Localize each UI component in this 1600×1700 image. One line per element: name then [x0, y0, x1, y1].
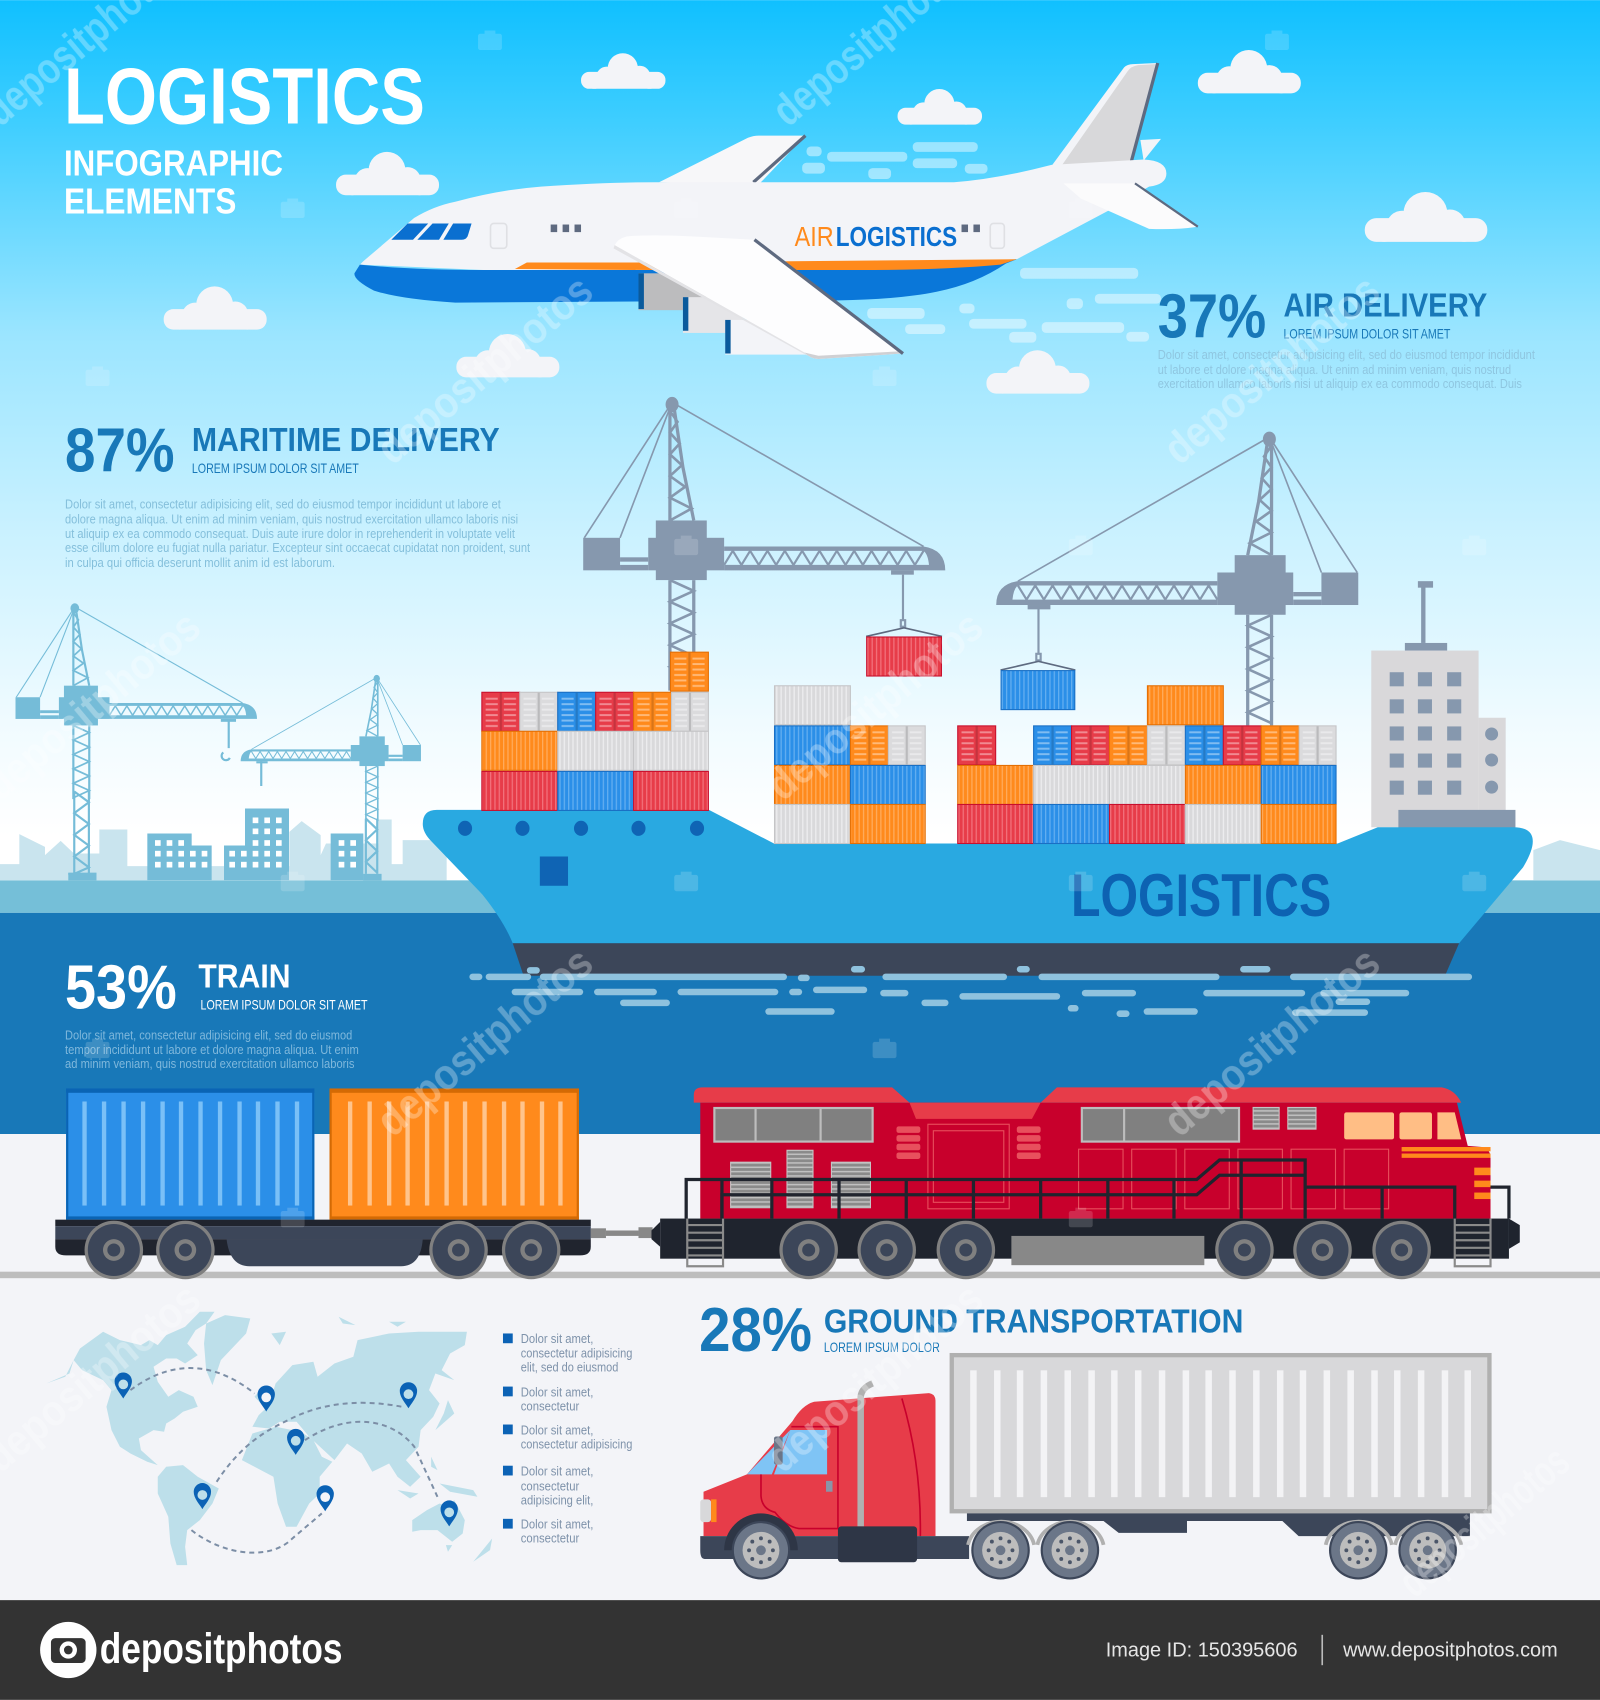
map legend list: consectetur — [521, 1399, 579, 1413]
locomotive — [651, 1087, 1520, 1279]
train stat: 53% — [65, 953, 177, 1022]
water ripples — [469, 966, 1472, 1017]
mirror — [774, 1436, 783, 1465]
fuselage — [360, 159, 1166, 271]
railings — [686, 1160, 1509, 1219]
map legend list: Dolor sit amet, — [521, 1423, 593, 1437]
train stat: LOREM IPSUM DOLOR SIT AMET — [201, 996, 368, 1012]
cargo ship — [423, 810, 1533, 976]
title: INFOGRAPHIC — [64, 144, 283, 184]
maritime delivery stat — [65, 417, 530, 570]
blue container — [66, 1088, 314, 1220]
map legend list: elit, sed do eiusmod — [521, 1360, 618, 1374]
orange stripe — [515, 259, 1017, 270]
map legend list: consectetur adipisicing — [521, 1346, 632, 1360]
louvres — [731, 1150, 870, 1208]
train stat: ad minim veniam, quis nostrud exercitation ullamco laboris — [65, 1056, 355, 1071]
belly — [354, 259, 1017, 303]
hull name: LOGISTICS — [1071, 861, 1331, 929]
ground transportation stat — [699, 1296, 1243, 1365]
maritime delivery stat: dolore magna aliqua. Ut enim ad minim veniam, quis nostrud exercitation ullamco laboris nisi — [65, 512, 518, 527]
watermarks: depositphotos — [758, 1275, 993, 1482]
hook and cable — [901, 575, 905, 627]
maritime delivery stat: Dolor sit amet, consectetur adipisicing elit, sed do eiusmod tempor incididunt ut labore et — [65, 497, 501, 512]
side windows — [714, 1108, 1239, 1142]
rear fenders — [968, 1522, 1461, 1545]
pale skyline — [0, 819, 1600, 880]
airline name: AIR — [795, 220, 834, 252]
ground transportation stat: LOREM IPSUM DOLOR — [824, 1339, 940, 1355]
watermarks: depositphotos — [1155, 939, 1389, 1146]
air delivery stat: 37% — [1158, 282, 1266, 351]
train stat — [65, 953, 368, 1071]
hull — [423, 810, 1533, 943]
coupler — [591, 1227, 653, 1238]
near stabiliser — [1063, 183, 1198, 229]
sleeper seam — [902, 1399, 920, 1536]
ground transportation stat: GROUND TRANSPORTATION — [824, 1303, 1243, 1340]
exhaust stack — [861, 1383, 873, 1526]
watermarks: depositphotos — [368, 266, 602, 474]
background crane right — [241, 675, 421, 880]
ground transportation stat: 28% — [699, 1296, 812, 1365]
map legend list: Dolor sit amet, — [521, 1518, 593, 1532]
building windows — [155, 817, 356, 867]
maritime delivery stat: in culpa qui officia deserunt mollit anim id est laborum. — [65, 555, 335, 570]
map legend list: Dolor sit amet, — [521, 1332, 593, 1346]
watermarks: depositphotos — [758, 602, 993, 810]
rail track — [0, 1272, 1600, 1278]
nose stripes — [1402, 1147, 1491, 1199]
airline name — [795, 220, 957, 252]
flatcar chassis — [55, 1220, 591, 1255]
near wing — [614, 235, 903, 359]
map legend list: consectetur — [521, 1480, 579, 1494]
map legend list: adipisicing elit, — [521, 1494, 593, 1508]
map legend list — [503, 1332, 632, 1546]
door outline — [761, 1427, 838, 1529]
locomotive underframe — [651, 1219, 1520, 1265]
maritime delivery stat: esse cillum dolore eu fugiat nulla pariatur. Excepteur sint occaecat cupidatat non proident, sunt — [65, 540, 530, 555]
roof — [694, 1087, 1461, 1119]
mid buildings — [147, 808, 363, 880]
location pins — [115, 1372, 458, 1526]
ground — [0, 1134, 1600, 1600]
far wing — [659, 136, 805, 184]
train stat: Dolor sit amet, consectetur adipisicing elit, sed do eiusmod — [65, 1028, 352, 1043]
watermarks: depositphotos — [368, 939, 602, 1146]
background crane left — [16, 603, 257, 880]
container stack: stern — [958, 686, 1336, 843]
wagon wheels — [85, 1221, 560, 1279]
maritime delivery stat: ut aliquip ex ea commodo consequat. Duis aute irure dolor in reprehenderit in voluptate velit — [65, 526, 515, 541]
roof vents — [1253, 1107, 1316, 1129]
cockpit windows — [391, 223, 472, 240]
tail fin — [1051, 63, 1158, 169]
orange container — [330, 1088, 579, 1220]
container stack: bow — [482, 652, 708, 810]
air delivery stat: LOREM IPSUM DOLOR SIT AMET — [1283, 325, 1451, 341]
airplane — [354, 63, 1198, 359]
dashed routes — [130, 1368, 437, 1553]
separator — [1321, 1635, 1323, 1665]
background skyline — [0, 808, 1600, 880]
harbour crane one — [583, 397, 945, 691]
hanging blue container — [1001, 661, 1075, 710]
camera watermark icons — [86, 30, 1486, 1227]
keel — [513, 943, 1459, 976]
air delivery stat: AIR DELIVERY — [1283, 288, 1487, 325]
maritime delivery stat: MARITIME DELIVERY — [192, 422, 500, 459]
cab — [704, 1393, 936, 1536]
harbour crane two — [996, 432, 1358, 725]
hanging red container — [866, 628, 942, 676]
ladders — [687, 1219, 1491, 1266]
legend markers — [503, 1333, 513, 1529]
title — [64, 51, 425, 222]
chassis — [700, 1536, 969, 1559]
locomotive body — [700, 1103, 1491, 1219]
footer logo — [40, 1622, 96, 1678]
far stabiliser — [1140, 139, 1161, 161]
clouds — [164, 50, 1487, 394]
trailer frame — [967, 1513, 1470, 1536]
train stat: tempor incididunt ut labore et dolore magna aliqua. Ut enim — [65, 1042, 359, 1057]
wagon well — [227, 1239, 423, 1266]
sea — [0, 913, 1600, 1134]
title: ELEMENTS — [64, 182, 236, 222]
continents — [46, 1312, 492, 1565]
doors and cabin windows — [491, 223, 1004, 248]
locomotive wheels — [779, 1221, 1431, 1279]
footer bar — [0, 1600, 1600, 1700]
side pills — [896, 1126, 1041, 1159]
fuel tank — [838, 1526, 917, 1562]
grey port building — [1371, 581, 1515, 828]
semi truck — [700, 1355, 1489, 1580]
windows — [747, 1430, 827, 1474]
freight wagon — [55, 1088, 653, 1279]
trailer container — [952, 1355, 1489, 1511]
shore land band — [0, 880, 1600, 913]
door handle — [826, 1481, 833, 1492]
train stat: TRAIN — [198, 959, 291, 996]
title: LOGISTICS — [64, 51, 425, 141]
watermarks: depositphotos — [1155, 266, 1389, 474]
image id: Image ID: 150395606 — [1106, 1640, 1298, 1662]
door and panels — [928, 1124, 1389, 1209]
cab windows — [1344, 1112, 1461, 1139]
airline name: LOGISTICS — [836, 220, 957, 252]
map legend list: consectetur — [521, 1532, 579, 1546]
sky background — [0, 0, 1600, 880]
air delivery stat: Dolor sit amet, consectetur adipisicing elit, sed do eiusmod tempor incididunt — [1158, 347, 1535, 362]
air delivery stat — [1158, 282, 1535, 391]
container stack: middle — [775, 686, 925, 843]
engines — [638, 273, 811, 355]
portholes — [458, 821, 704, 886]
world map — [46, 1312, 492, 1565]
map legend list: Dolor sit amet, — [521, 1464, 593, 1478]
headlight — [700, 1499, 717, 1522]
site url: www.depositphotos.com — [1342, 1640, 1558, 1662]
front wheel arch — [724, 1513, 798, 1550]
speed lines behind plane — [802, 142, 1161, 343]
air delivery stat: ut labore et dolore magna aliqua. Ut enim ad minim veniam, quis nostrud — [1158, 362, 1511, 377]
map legend list: Dolor sit amet, — [521, 1385, 593, 1399]
map legend list: consectetur adipisicing — [521, 1437, 632, 1451]
air delivery stat: exercitation ullamco laboris nisi ut aliquip ex ea commodo consequat. Duis — [1158, 376, 1522, 391]
maritime delivery stat: 87% — [65, 417, 175, 486]
footer brand: depositphotos — [100, 1625, 343, 1672]
maritime delivery stat: LOREM IPSUM DOLOR SIT AMET — [192, 460, 359, 476]
truck wheels — [732, 1521, 1457, 1580]
hook and cable — [1036, 607, 1041, 660]
